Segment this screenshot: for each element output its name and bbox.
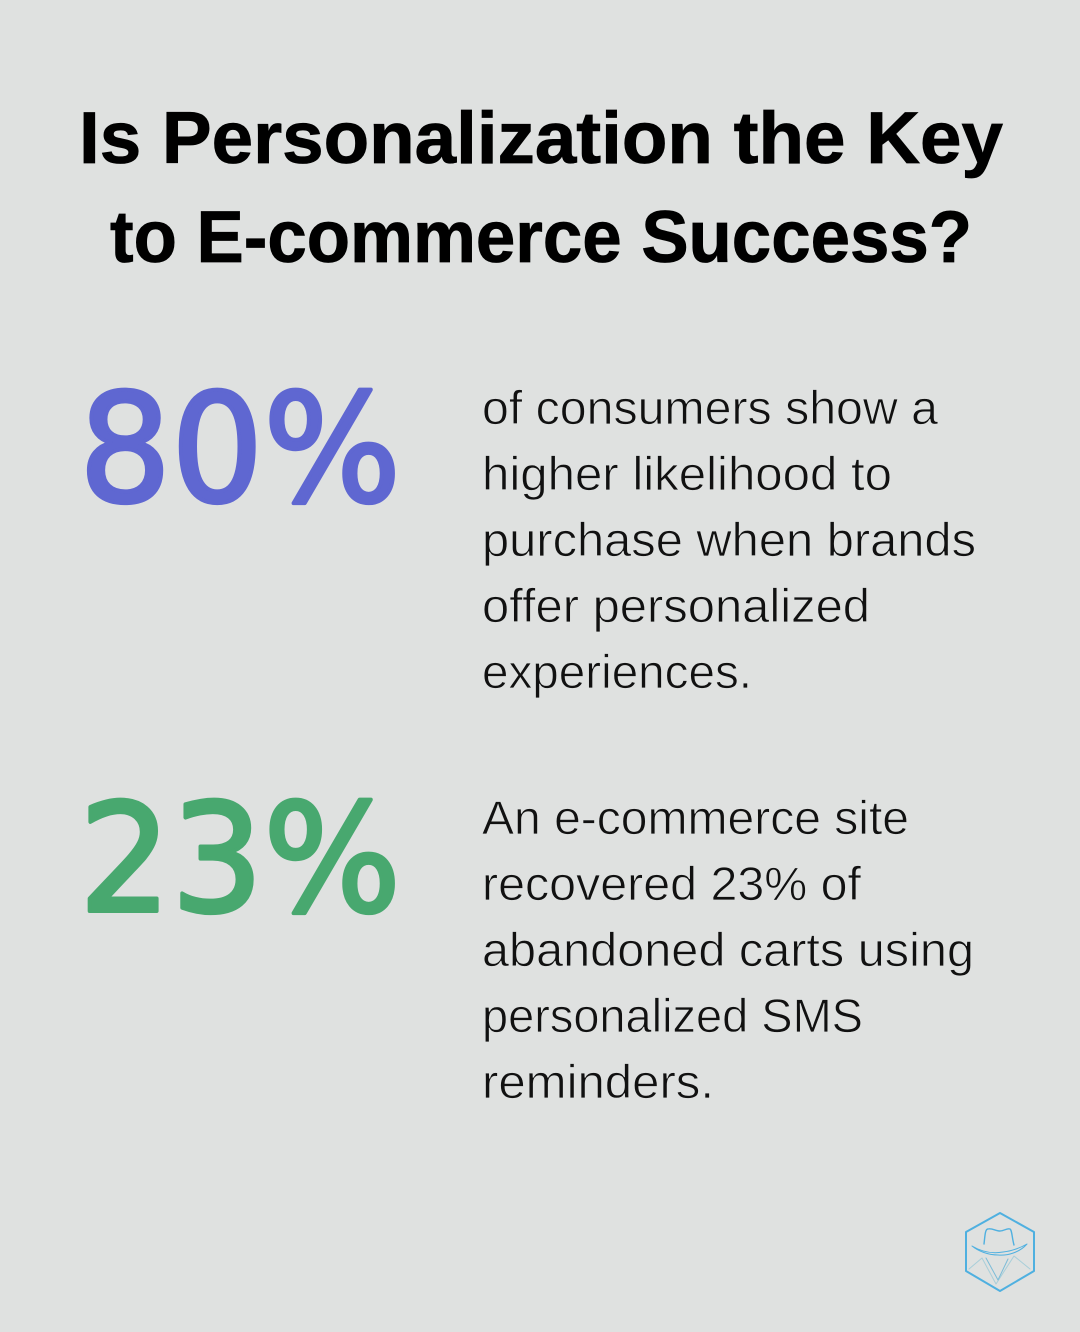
text block: 23% description: abandoned carts using [482, 924, 974, 977]
stat: 23%: 23% [79, 773, 401, 947]
text block: 23% description: personalized SMS [482, 990, 863, 1043]
title: Is Personalization the Key [79, 98, 1003, 179]
icon: hexagon spy logo [966, 1213, 1034, 1291]
text block: 80% description: purchase when brands [482, 514, 976, 567]
text block: 80% description: offer personalized [482, 580, 870, 633]
text block: 23% description [482, 792, 974, 1109]
title [79, 98, 1003, 278]
text block: 80% description: higher likelihood to [482, 448, 892, 501]
title: to E-commerce Success? [110, 197, 972, 278]
text block: 23% description: reminders. [482, 1056, 714, 1109]
text block: 80% description [482, 382, 976, 699]
text block: 80% description: experiences. [482, 646, 752, 699]
text block: 80% description: of consumers show a [482, 382, 939, 435]
stat: 80%: 80% [79, 363, 401, 537]
text block: 23% description: An e-commerce site [482, 792, 909, 845]
text block: 23% description: recovered 23% of [482, 858, 862, 911]
